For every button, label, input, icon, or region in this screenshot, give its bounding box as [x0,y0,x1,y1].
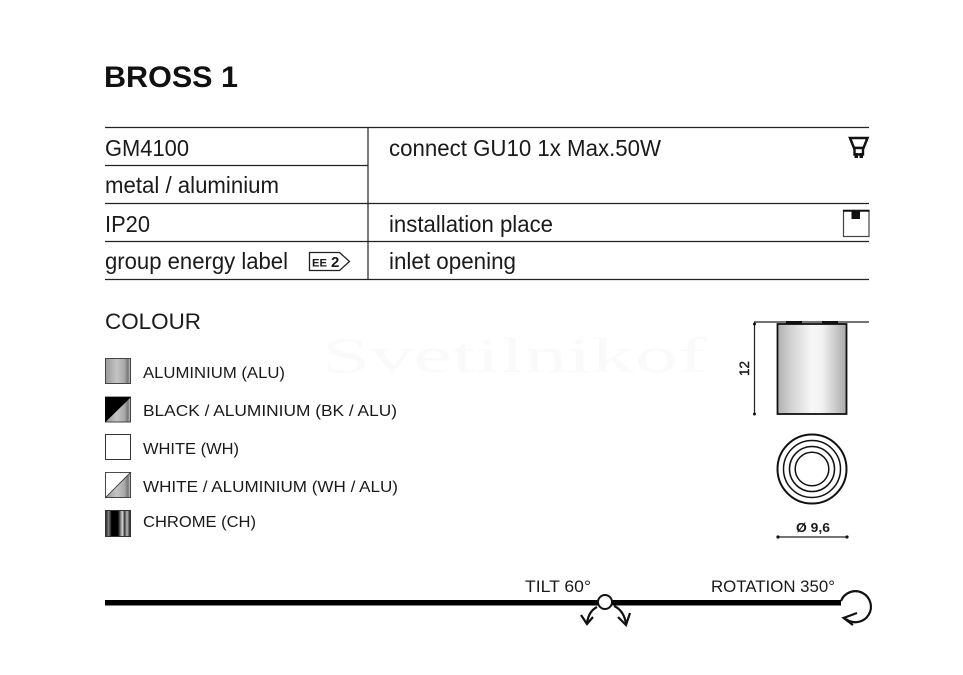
label: black / aluminium: BLACK / ALUMINIUM (BK / ALU) [143,403,397,420]
spec: model code: GM4100 [105,135,189,161]
icon: energy label badge [310,252,350,271]
spec: inlet opening: inlet opening [389,248,516,274]
spec: energy label: group energy label [105,248,288,274]
label: white / aluminium: WHITE / ALUMINIUM (WH / ALU) [143,479,398,496]
swatch: black / aluminium [105,397,131,422]
rotation label: ROTATION 350° [711,578,835,596]
icon: energy label badge: 2 [331,254,339,271]
dimension: diameter [776,521,849,539]
dimension: diameter: Ø 9,6 [796,521,830,535]
watermark: Svetilnikof [322,327,708,383]
spec: IP rating: IP20 [105,211,150,237]
icon: tilt joint with arrows [581,595,630,625]
swatch: white / aluminium [106,472,130,498]
tilt label: TILT 60° [525,578,591,596]
label: white: WHITE (WH) [143,441,239,458]
specification table [105,127,870,280]
colour list [105,358,398,536]
icon: rotation arrow [841,591,871,625]
swatch: aluminium [106,358,130,384]
swatch: chrome [106,510,130,536]
swatch: white [106,434,130,460]
icon: GU10 bulb [850,138,868,158]
title: BROSS 1 [104,61,238,94]
spec: connection: connect GU10 1x Max.50W [389,135,661,161]
front view drawing [778,434,846,504]
side view drawing [737,321,869,416]
icon: energy label badge: EE [312,258,327,270]
label: chrome: CHROME (CH) [143,514,256,531]
label: aluminium: ALUMINIUM (ALU) [143,365,285,382]
spec: installation place: installation place [389,211,553,237]
spec: material: metal / aluminium [105,172,279,198]
dimension: height: 12 [737,361,752,376]
colour heading: COLOUR [105,309,201,334]
lamp arm bar [105,600,841,606]
icon: installation place ceiling [843,210,870,236]
